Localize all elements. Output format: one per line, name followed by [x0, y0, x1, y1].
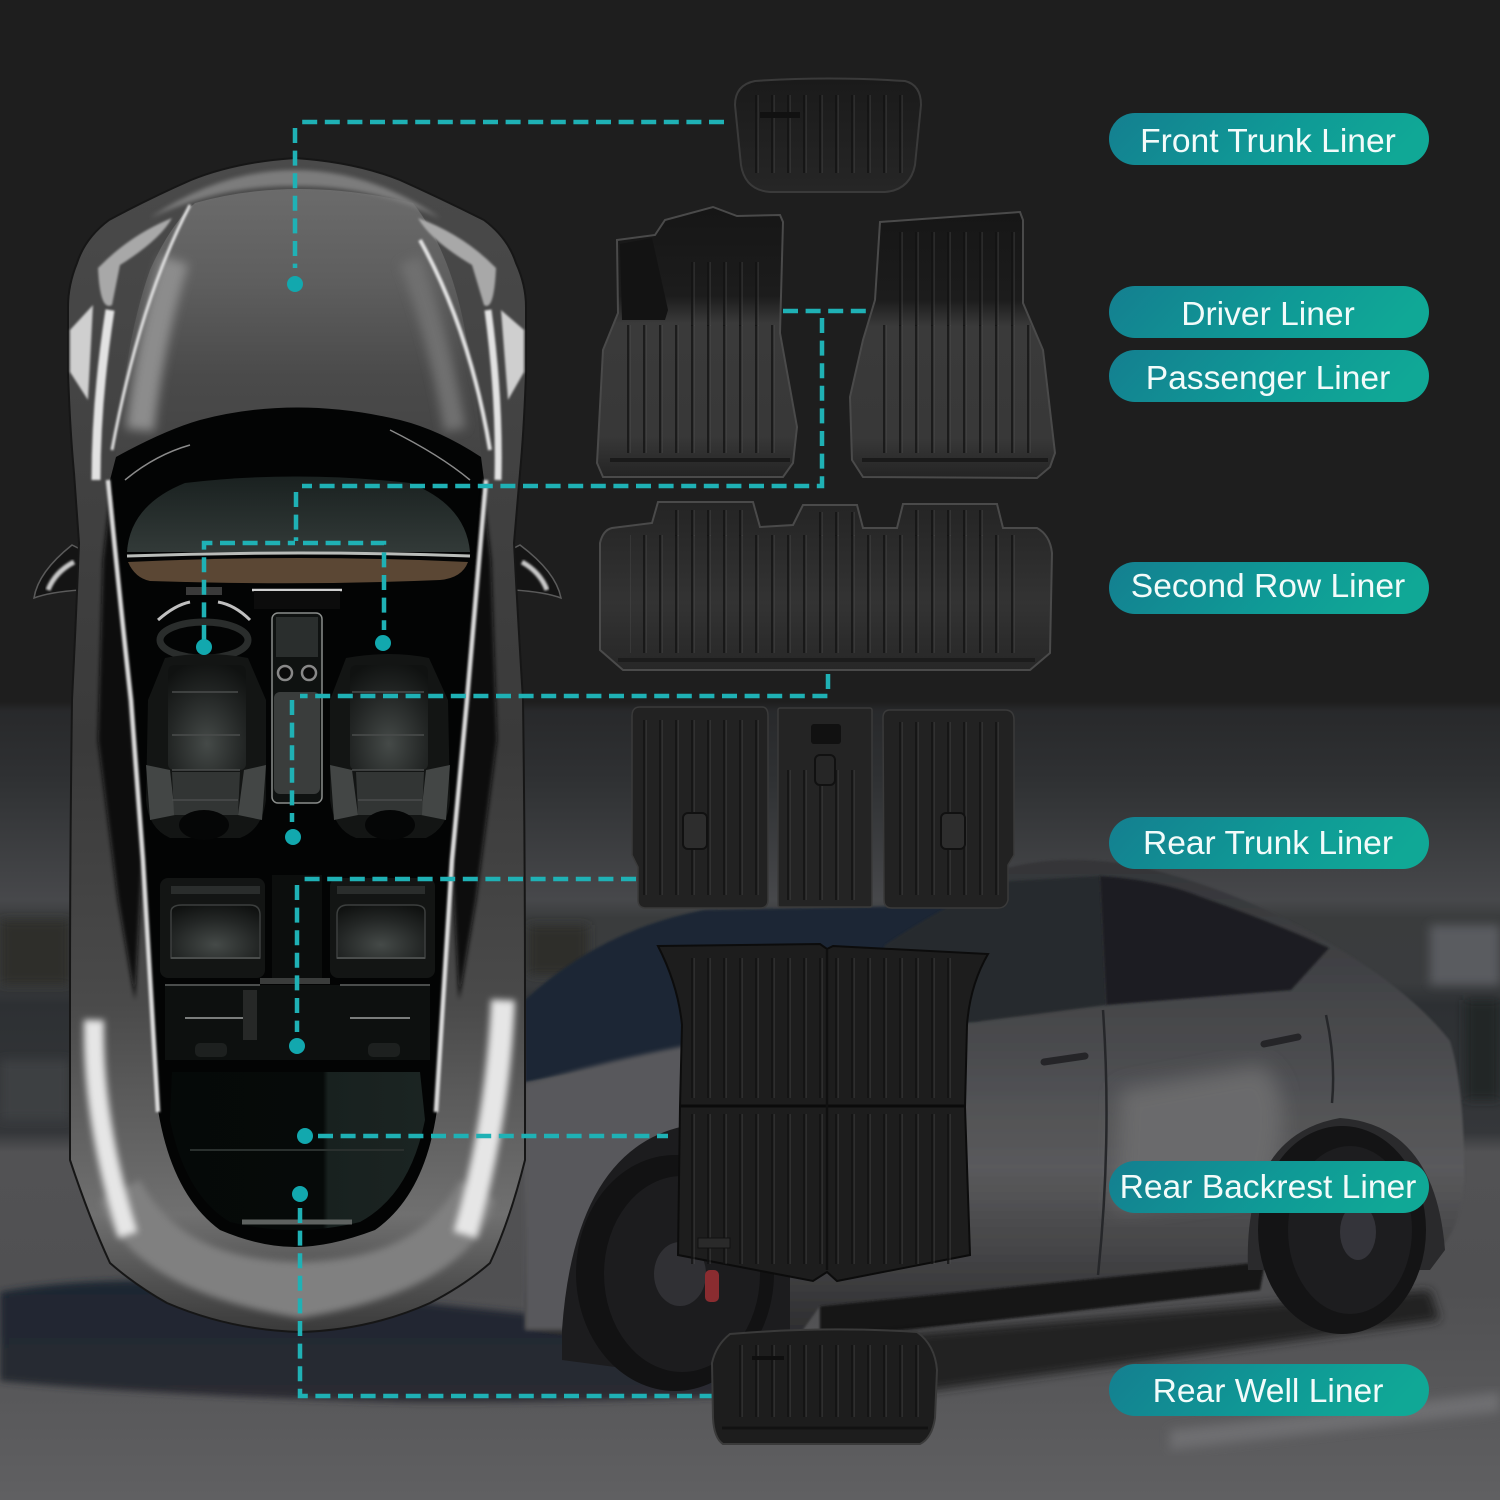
cargo area	[170, 1072, 425, 1230]
mat: rear trunk liner	[632, 707, 1014, 908]
rear left seat	[160, 878, 265, 978]
side car hood	[525, 905, 980, 1082]
sill	[820, 1262, 1265, 1340]
label: Driver Liner: Driver Liner	[1181, 296, 1355, 333]
side car fender and body	[525, 860, 1464, 1390]
hood sheen	[140, 260, 455, 430]
label: Driver Liner	[1109, 286, 1429, 338]
connector dots	[196, 276, 391, 1202]
left mirror	[34, 545, 86, 598]
side view car	[525, 860, 1464, 1395]
right panel	[883, 710, 1014, 908]
right headlight	[418, 218, 496, 306]
side car rear window	[1100, 876, 1329, 1005]
label: Rear Trunk Liner: Rear Trunk Liner	[1143, 825, 1393, 862]
mat: rear backrest liner	[658, 944, 988, 1281]
side car front window	[850, 876, 1106, 1030]
right mirror highlight	[522, 562, 547, 590]
label: Front Trunk Liner	[1109, 113, 1429, 165]
steering wheel	[158, 587, 250, 658]
label: Second Row Liner	[1109, 562, 1429, 614]
silver dash trim	[127, 553, 470, 556]
tailgate trim	[242, 1220, 352, 1224]
left headlight	[98, 218, 172, 306]
front left seat	[146, 654, 266, 840]
label: Passenger Liner: Passenger Liner	[1146, 360, 1390, 397]
label: Rear Backrest Liner: Rear Backrest Liner	[1120, 1169, 1416, 1206]
label: Second Row Liner: Second Row Liner	[1131, 568, 1405, 605]
label: Front Trunk Liner: Front Trunk Liner	[1140, 123, 1396, 160]
car body	[68, 158, 526, 1332]
dashboard	[127, 476, 470, 552]
hood	[116, 189, 481, 457]
label: Rear Trunk Liner	[1109, 817, 1429, 869]
rear wheel arch	[1248, 1118, 1445, 1270]
label: Passenger Liner	[1109, 350, 1429, 402]
front wheel	[576, 1155, 774, 1391]
door line and handles	[1044, 1010, 1333, 1275]
road streak	[1170, 1392, 1500, 1450]
top view car	[34, 158, 561, 1332]
mat: rear well liner	[712, 1329, 937, 1444]
center panel	[778, 708, 872, 907]
label: Rear Well Liner	[1109, 1364, 1429, 1416]
connector lines	[204, 122, 866, 1396]
road shadow under the car	[0, 1280, 880, 1402]
left side window	[98, 480, 142, 1000]
front fender silver patches	[70, 305, 524, 400]
roof pillars	[108, 480, 486, 1112]
right mirror	[506, 545, 561, 598]
front wheel arch	[562, 1125, 790, 1390]
mat: passenger liner	[850, 212, 1055, 478]
cabin black interior	[110, 408, 484, 1247]
front right seat	[330, 654, 450, 840]
right side window	[452, 480, 497, 1000]
label: Rear Backrest Liner	[1109, 1161, 1429, 1213]
windshield reflection lines	[125, 430, 470, 480]
door highlight	[1115, 1065, 1283, 1210]
side car ground shadow	[770, 1290, 1440, 1395]
blurred trees and buildings	[0, 920, 1500, 1120]
nose band	[150, 170, 440, 218]
center console	[252, 590, 342, 803]
left mirror highlight	[48, 562, 74, 590]
hood edge highlights	[96, 205, 498, 480]
mat: front trunk liner	[735, 78, 921, 192]
rear bumper sheen	[100, 1180, 495, 1318]
mat: driver liner	[597, 207, 797, 477]
rear center seat and lower row	[165, 875, 430, 1060]
rear fender highlights	[94, 1000, 503, 1235]
side car front fender	[525, 1030, 790, 1330]
rear wheel	[1258, 1126, 1426, 1334]
left panel	[632, 707, 768, 908]
rear right seat	[330, 878, 435, 978]
label: Rear Well Liner: Rear Well Liner	[1153, 1373, 1383, 1410]
wood trim	[128, 558, 468, 583]
cargo fold line	[190, 1149, 404, 1151]
mat: second row liner	[600, 502, 1052, 670]
